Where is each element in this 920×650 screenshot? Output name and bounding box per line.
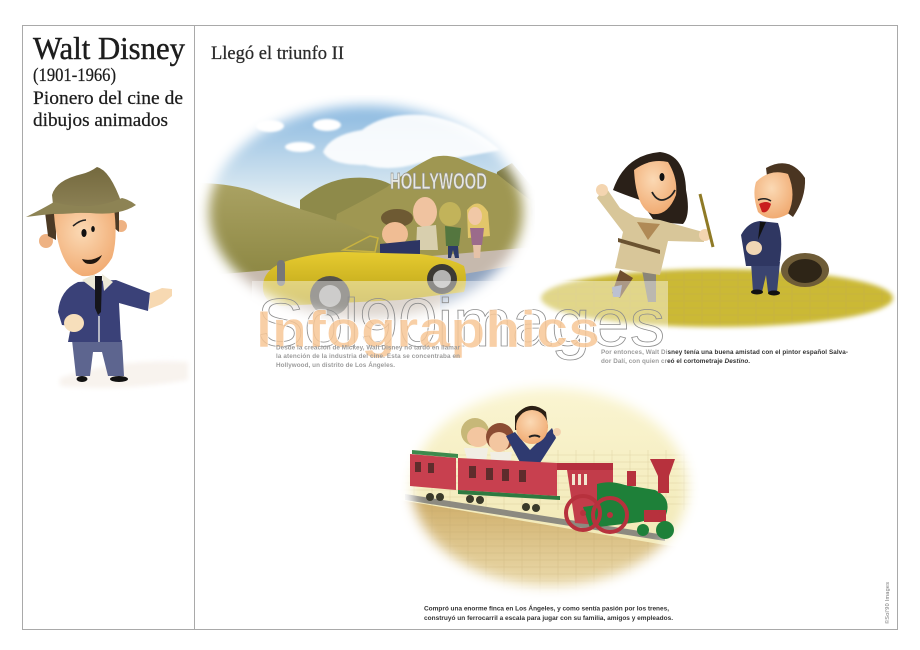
- caption: Dalí: Por entonces, Walt Disney tenía una buena amistad con el pintor español Salva-: [601, 349, 848, 356]
- title block: [33, 30, 185, 131]
- Disney: [751, 262, 780, 292]
- scene: Dalí and Disney on yellow floor: [530, 152, 900, 335]
- caption: train: [424, 604, 673, 622]
- hat on floor: [781, 253, 829, 287]
- bystanders: [413, 197, 437, 227]
- Dalí: [612, 270, 633, 298]
- caption: Hollywood: Desde la creación de Mickey, Walt Disney no tardó en llamar: [276, 344, 461, 352]
- watermark: Infographics: [256, 301, 600, 359]
- caption: Hollywood: [276, 344, 461, 369]
- scene: family on model train: [400, 375, 700, 600]
- car: [381, 209, 413, 227]
- caption: Hollywood: Hollywood, un distrito de Los Ángeles.: [276, 360, 395, 369]
- caption: train: construyó un ferrocarril a escala para jugar con su familia, amigos y empleados.: [424, 615, 673, 622]
- scene: Hollywood landscape with car: [195, 95, 535, 340]
- train cars: [412, 450, 458, 458]
- locomotive: [557, 463, 613, 470]
- clouds: [256, 115, 500, 168]
- title block: dibujos animados: [33, 110, 168, 131]
- Hollywood sign: HOLLYWOOD: [390, 168, 487, 194]
- watermark: Sol90images: [257, 285, 665, 361]
- caption: Dalí: [601, 349, 848, 365]
- title block: Pionero del cine de: [33, 88, 183, 109]
- passengers: [461, 418, 489, 446]
- title block: Walt Disney: [33, 30, 185, 66]
- title block: (1901-1966): [33, 66, 116, 86]
- credit: ©Sol'90 Images: [884, 582, 891, 624]
- caption: Hollywood: la atención de la industria del cine. Esta se concentraba en: [276, 353, 460, 360]
- caption: Dalí: dor Dalí, con quien creó el cortometraje Destino.: [601, 358, 750, 365]
- figure: Walt Disney with hat: [26, 167, 188, 388]
- heading: Llegó el triunfo II: [211, 43, 344, 64]
- caption: train: Compró una enorme finca en Los Ángeles, y como sentía pasión por los trenes,: [424, 604, 669, 612]
